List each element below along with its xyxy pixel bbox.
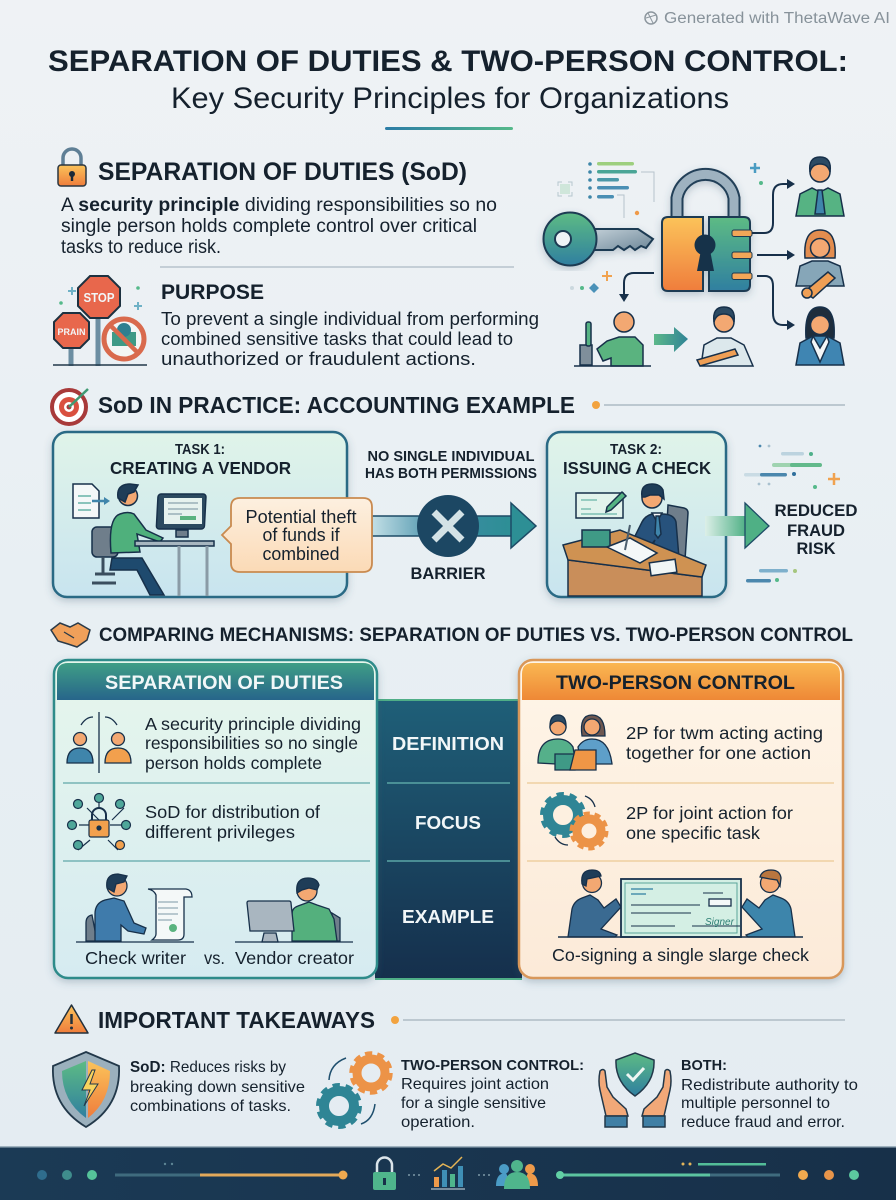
column heading: SEPARATION OF DUTIES [105, 673, 343, 694]
task 1 heading: CREATING A VENDOR [110, 458, 291, 478]
person: woman in blazer [796, 307, 844, 365]
takeaway text: reduce fraud and error. [681, 1114, 845, 1131]
definition text: together for one action [626, 743, 811, 763]
watermark: Generated with ThetaWave AI [664, 10, 890, 27]
illustration: co-signing check [558, 870, 803, 937]
purpose text: To prevent a single individual from performing [161, 309, 539, 329]
focus text: 2P for joint action for [626, 803, 793, 823]
section heading: accounting example [52, 389, 575, 424]
purpose text [161, 309, 539, 369]
takeaway text [130, 1059, 305, 1115]
callout: potential theft: Potential theft [246, 507, 356, 527]
definition text: single person holds complete control over critical [61, 216, 477, 237]
icon: barrier x [417, 495, 479, 557]
label: barrier: BARRIER [410, 564, 486, 583]
label: no single individual [365, 448, 537, 482]
section heading: accounting example: SoD IN PRACTICE: ACCOUNTING EXAMPLE [98, 392, 575, 418]
focus text [626, 803, 793, 843]
definition text: A security principle dividing responsibilities so no [61, 195, 497, 216]
footer icon: chart [431, 1157, 465, 1189]
illustration: co-signing check: Signer [705, 917, 735, 928]
icon: target [52, 389, 88, 424]
panel: task 2 [547, 432, 726, 597]
focus text: SoD for distribution of [145, 802, 320, 822]
takeaway text: operation. [401, 1114, 475, 1131]
takeaway text: BOTH: [681, 1057, 727, 1074]
callout: potential theft [222, 498, 372, 572]
illustration: key, lock and people [544, 157, 844, 366]
icon: stop signs: PRAIN [58, 327, 86, 337]
arrow: barrier arrow [372, 503, 536, 548]
label: reduced fraud risk: RISK [796, 540, 836, 558]
task 2 heading: ISSUING A CHECK [563, 458, 711, 478]
label: reduced fraud risk: FRAUD [787, 522, 845, 540]
icon: padlock [58, 149, 86, 186]
panel: row labels [375, 699, 522, 980]
takeaway: two-person control [319, 1054, 584, 1131]
icon: gears [319, 1054, 390, 1126]
icon: two gears [543, 795, 606, 848]
definition text [61, 195, 497, 258]
callout: potential theft: combined [262, 544, 340, 564]
purpose text: unauthorized or fraudulent actions. [161, 349, 476, 369]
row label: example: EXAMPLE [402, 907, 494, 927]
takeaway text: SoD: Reduces risks by [130, 1059, 286, 1076]
label: check writer: Check writer [85, 948, 186, 968]
definition text: 2P for twm acting acting [626, 723, 823, 743]
decorative list [558, 162, 763, 293]
takeaway text: combinations of tasks. [130, 1098, 291, 1115]
heading: PURPOSE [161, 281, 264, 304]
definition text: person holds complete [145, 753, 322, 773]
task 1 label: TASK 1: [175, 442, 225, 458]
focus text [145, 802, 320, 842]
column heading: TWO-PERSON CONTROL [556, 673, 795, 694]
icon: handshake [51, 623, 90, 647]
definition text [145, 714, 361, 773]
label: no single individual: HAS BOTH PERMISSIONS [365, 465, 537, 482]
illustration: vendor creator [235, 878, 353, 942]
takeaway: SoD [53, 1052, 305, 1127]
footer icon: people [496, 1160, 538, 1189]
icon: two people with puzzle [538, 715, 612, 770]
definition text: tasks to reduce risk. [61, 237, 221, 258]
focus text: different privileges [145, 822, 295, 842]
panel: separation of duties definition [58, 149, 497, 258]
takeaway text: TWO-PERSON CONTROL: [401, 1057, 584, 1074]
person: man with tie [796, 157, 844, 216]
takeaway text: for a single sensitive [401, 1095, 546, 1112]
panel: purpose [53, 276, 539, 369]
definition text: responsibilities so no single [145, 733, 358, 753]
label: reduced fraud risk [774, 502, 858, 558]
illustration: check writer [76, 874, 194, 942]
takeaway text: Redistribute authority to [681, 1077, 858, 1094]
definition text: A security principle dividing [145, 714, 361, 734]
focus text: one specific task [626, 823, 760, 843]
subtitle: Key Security Principles for Organizations [171, 82, 729, 115]
icon: large padlock [662, 174, 752, 291]
title: SEPARATION OF DUTIES & TWO-PERSON CONTROL: [48, 45, 848, 78]
arrow: between workers [654, 327, 688, 352]
row label: focus: FOCUS [415, 813, 481, 833]
label: vendor creator: Vendor creator [235, 948, 354, 968]
label: reduced fraud risk: REDUCED [774, 502, 858, 520]
footer icon: lock [373, 1158, 396, 1190]
person: man holding key [697, 307, 753, 366]
takeaway text: multiple personnel to [681, 1095, 830, 1112]
person: woman with key [796, 230, 844, 298]
icon: stop signs: STOP [84, 290, 115, 305]
icon: warning [55, 1005, 88, 1033]
takeaway text [681, 1057, 858, 1131]
illustration: person signing check [563, 484, 706, 596]
icon: key [544, 212, 653, 266]
icon: shield [53, 1052, 119, 1127]
example caption: Co-signing a single slarge check [552, 945, 809, 965]
definition text [626, 723, 823, 763]
arrow: to reduced fraud risk [705, 503, 769, 548]
section heading: important takeaways: IMPORTANT TAKEAWAYS [98, 1007, 375, 1033]
row label: definition: DEFINITION [392, 734, 504, 754]
illustration: person at computer [73, 484, 214, 596]
panel: task 1 [53, 432, 347, 597]
takeaway text [401, 1057, 584, 1131]
callout: potential theft: of funds if [262, 525, 340, 545]
takeaway: both [599, 1053, 858, 1131]
task 2 label: TASK 2: [610, 441, 662, 458]
label: no single individual: NO SINGLE INDIVIDUAL [368, 448, 534, 465]
heading: SEPARATION OF DUTIES (SoD) [98, 158, 467, 186]
takeaway text: breaking down sensitive [130, 1079, 305, 1096]
icon: divided people [67, 712, 131, 773]
footer band [0, 1146, 896, 1200]
panel: two-person control column [519, 660, 843, 978]
person: worker with tool [574, 312, 651, 366]
takeaway text: Requires joint action [401, 1076, 549, 1093]
panel: separation of duties column [54, 660, 377, 978]
icon: stop signs [53, 276, 147, 366]
purpose text: combined sensitive tasks that could lead to [161, 329, 513, 349]
icon: distributed lock [68, 794, 130, 850]
section heading: comparing mechanisms: COMPARING MECHANISMS: SEPARATION OF DUTIES VS. TWO-PERSON CONTROL [99, 624, 853, 646]
arrows from lock [619, 179, 795, 330]
label: versus: vs. [204, 948, 225, 968]
icon: hands and shield [599, 1053, 671, 1127]
